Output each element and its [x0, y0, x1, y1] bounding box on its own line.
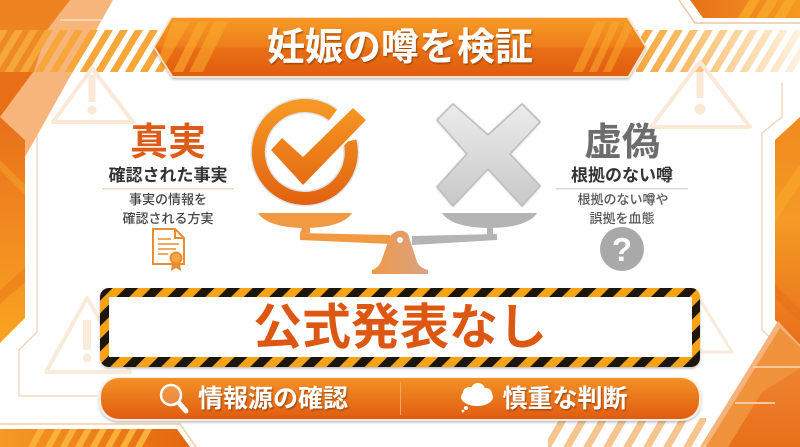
decoration: top-right corner: [679, 0, 800, 23]
title text: 妊娠の噂を検証: [267, 27, 533, 69]
description: falsehood: 根拠のない噂や: [577, 192, 669, 207]
icon: question mark: [600, 227, 644, 271]
balance scale: [258, 213, 537, 274]
subheading: truth: 確認された事実: [108, 166, 228, 185]
warning triangle: upper left: [53, 68, 133, 122]
icon: cross mark: [437, 104, 540, 206]
panel: truth: [102, 122, 234, 271]
callout: no official announcement: [100, 288, 700, 367]
decoration: top-left corner: [0, 0, 113, 343]
icon: question mark: ?: [612, 231, 632, 268]
title banner: [153, 17, 647, 78]
decoration: circuit outlines: [19, 83, 785, 396]
callout text: 公式発表なし: [253, 301, 547, 355]
panel: falsehood: [556, 122, 688, 271]
left pan: [258, 213, 352, 228]
icon: magnifier: [161, 385, 186, 411]
heading: falsehood: 虚偽: [584, 122, 660, 164]
right beam: [412, 234, 497, 245]
right pan: [442, 213, 537, 228]
heading: truth: 真実: [130, 122, 206, 164]
subheading: falsehood: 根拠のない噂: [571, 166, 673, 185]
action bar: [99, 377, 701, 421]
decoration: hatch band bottom right: [548, 418, 706, 447]
decoration: bottom-left corner: [0, 424, 196, 447]
fulcrum: [372, 230, 428, 274]
left beam: [300, 233, 390, 244]
decoration: right panel and bottom-right corner: [700, 117, 800, 447]
description: truth: 確認される方実: [122, 211, 214, 226]
description: falsehood: 誤拠を血態: [589, 211, 655, 226]
decoration: right hatch band: [636, 30, 800, 72]
warning triangle: upper right: [651, 62, 750, 127]
decoration: left hatch band: [0, 30, 168, 72]
warning triangle: lower left: [46, 298, 130, 372]
warning triangle: lower right: [690, 300, 732, 352]
label: check sources: 情報源の確認: [198, 385, 348, 413]
icon: thought cloud: [461, 383, 493, 412]
label: careful judgment: 慎重な判断: [502, 385, 628, 413]
icon: certificate document: [153, 229, 184, 271]
description: truth: 事実の情報を: [129, 192, 207, 207]
icon: check mark in ring: [258, 105, 366, 198]
